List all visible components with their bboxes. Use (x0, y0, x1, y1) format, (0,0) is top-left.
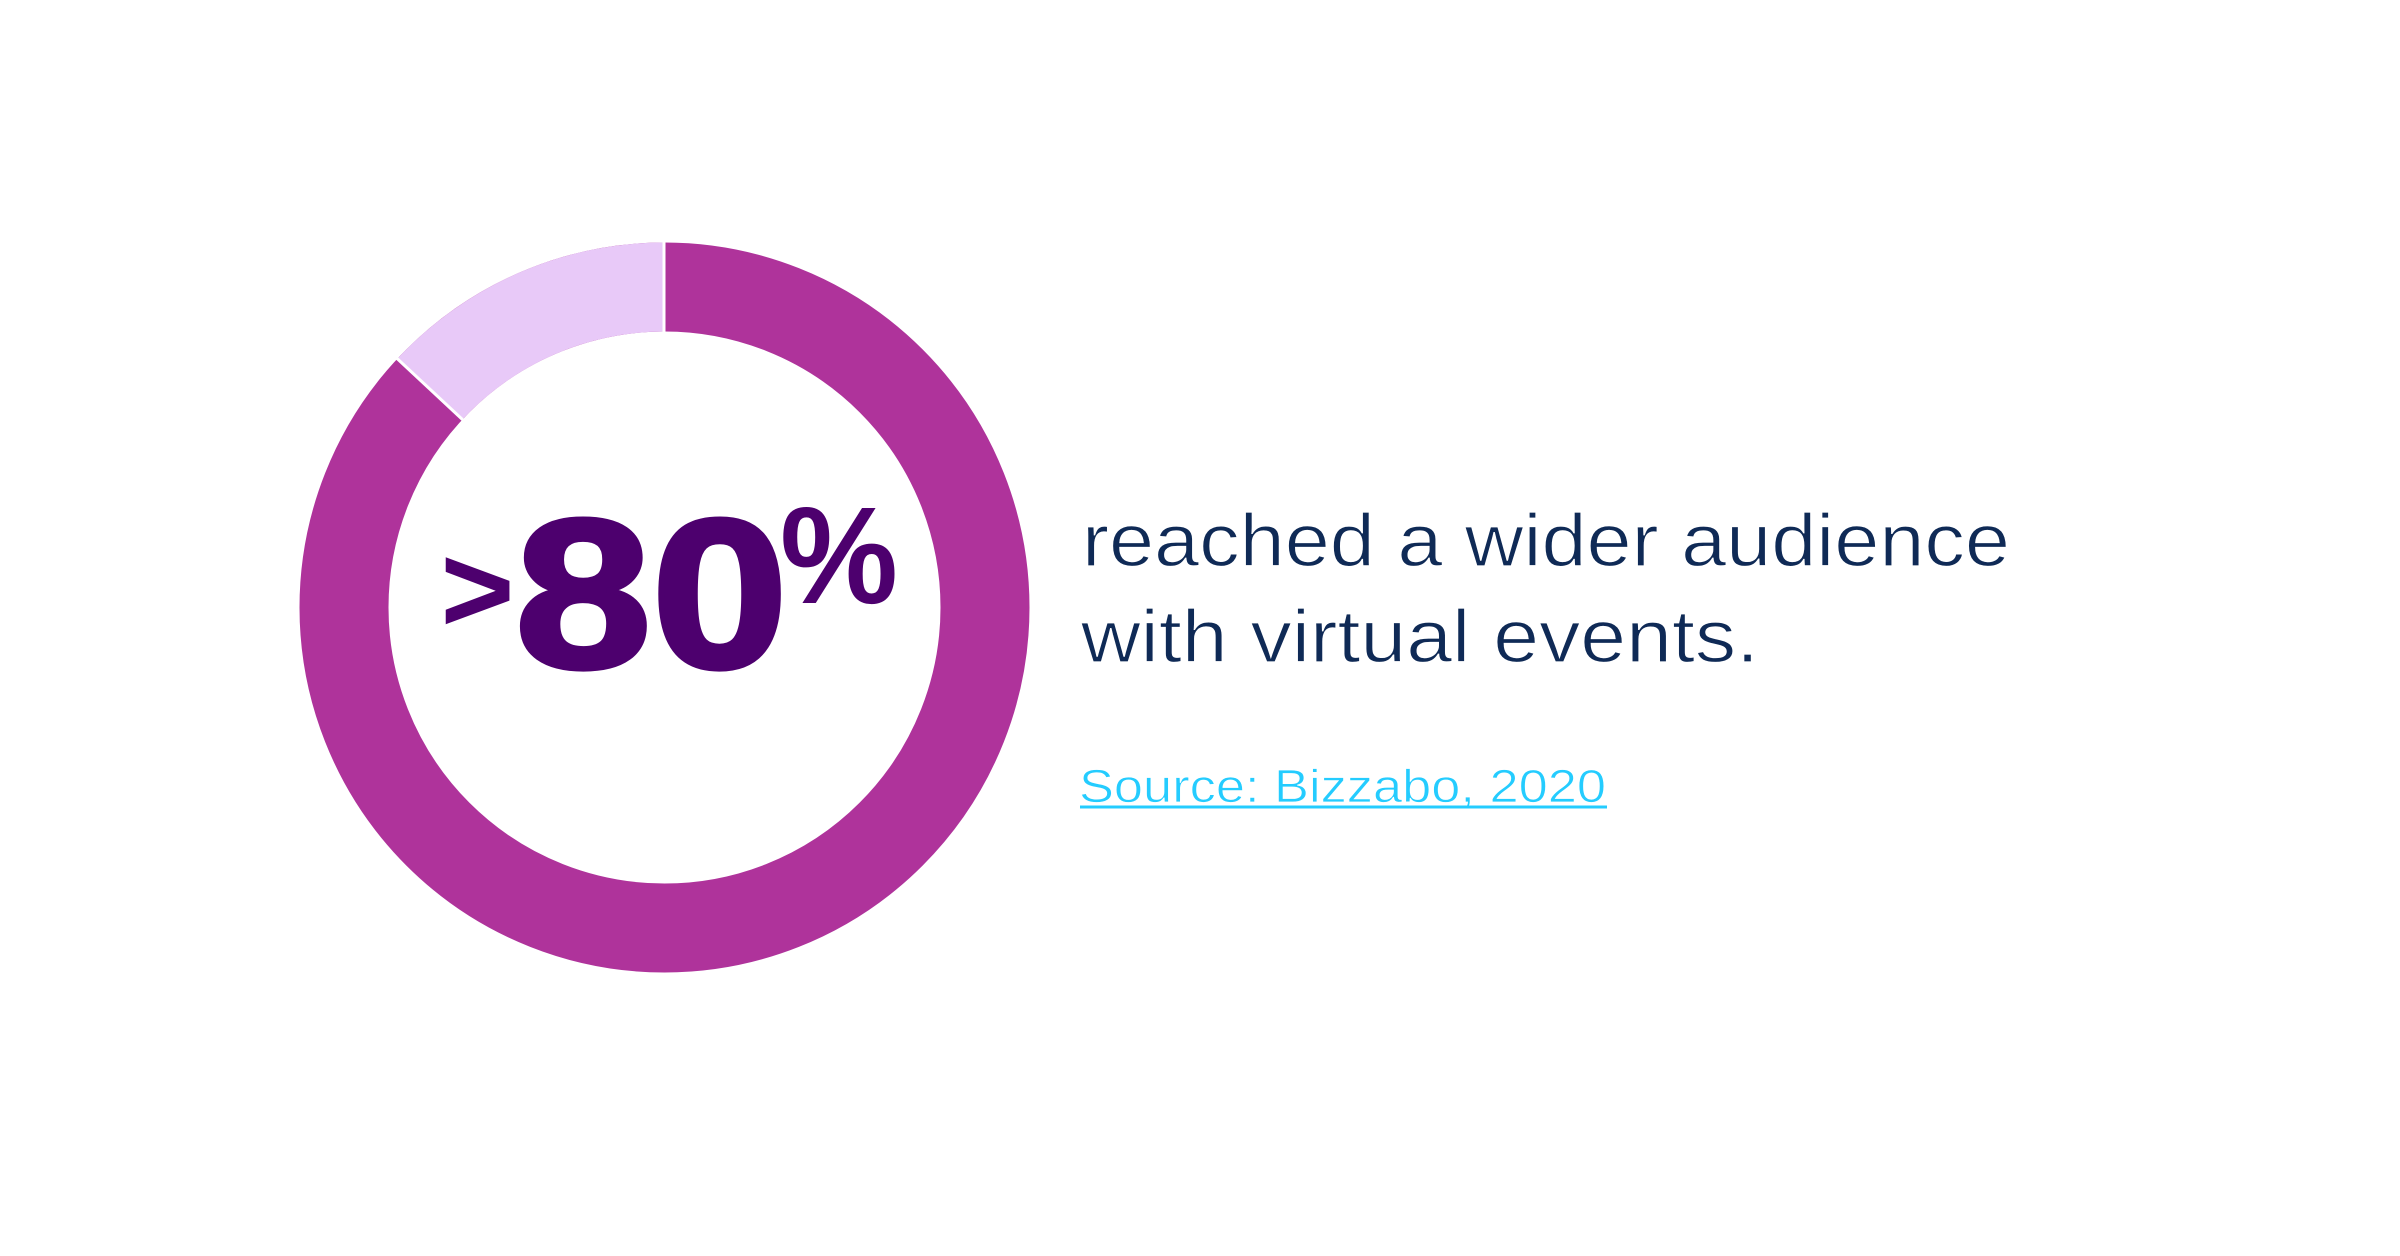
donut chart (344, 240, 985, 928)
big statistic: >80%: > (441, 521, 514, 657)
description text (1080, 499, 2010, 678)
source link: Source: Bizzabo, 2020 (1079, 760, 1606, 812)
donut segment: over 80 percent majority (344, 287, 985, 928)
big statistic: >80% (441, 475, 898, 712)
description text: reached a wider audience (1082, 499, 2010, 582)
donut segment: remainder (398, 242, 664, 419)
big statistic: >80%: 80 (515, 475, 788, 712)
big statistic: >80%: % (780, 479, 898, 633)
description text: with virtual events. (1080, 595, 1759, 678)
